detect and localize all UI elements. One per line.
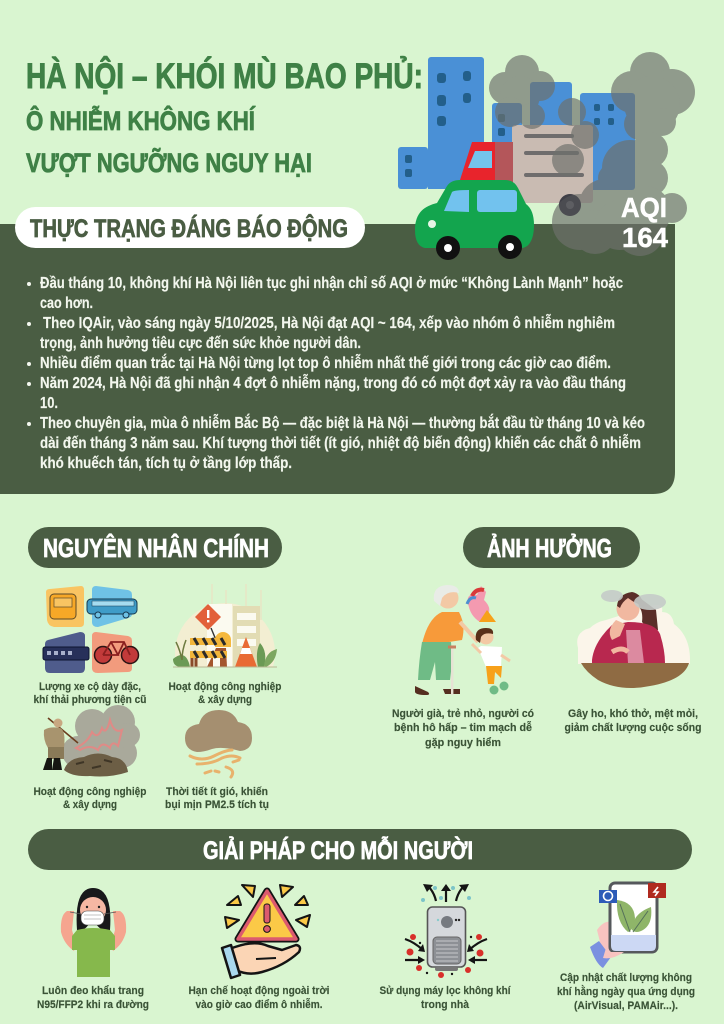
caption: industry and construction: [168, 681, 282, 706]
caption: vulnerable people: gặp nguy hiểm: [425, 737, 501, 749]
buildings: [398, 57, 635, 190]
panel: current situation: [0, 224, 675, 494]
caption: vulnerable people: [392, 708, 534, 749]
AQI label: [621, 192, 668, 253]
icon: air purifier: [405, 884, 487, 978]
caption: traffic: Lượng xe cộ dày đặc,: [39, 681, 141, 693]
text block: situation bullets: [27, 275, 645, 472]
caption: industry and construction: & xây dựng: [198, 694, 252, 706]
heading pill: main causes: [28, 527, 282, 568]
heading pill: effects: [463, 527, 640, 568]
caption: limit outdoor activity: vào giờ cao điểm ô nhiễm.: [196, 998, 322, 1011]
heading pill: solutions: [28, 829, 692, 870]
text block: situation bullets: trọng, ảnh hưởng tiêu cực đến sức khỏe người dân.: [40, 335, 361, 352]
caption: vulnerable people: bệnh hô hấp – tim mạch dễ: [394, 721, 532, 734]
caption: industry and construction: Hoạt động công nghiệp: [168, 681, 282, 693]
truck: [460, 125, 593, 216]
green car: [415, 180, 534, 260]
text block: situation bullets: 10.: [40, 395, 58, 412]
text block: situation bullets: Năm 2024, Hà Nội đã ghi nhận 4 đợt ô nhiễm nặng, trong đó có một đợt xảy ra vào đầu tháng: [40, 375, 626, 392]
heading pill: solutions: GIẢI PHÁP CHO MỖI NGƯỜI: [203, 835, 473, 865]
caption: burning: Hoạt động công nghiệp: [34, 786, 147, 798]
icon: girl with mask: [61, 888, 126, 977]
caption: wear mask: Luôn đeo khẩu trang: [42, 985, 144, 997]
child: [478, 646, 502, 667]
caption: air quality apps: [557, 972, 695, 1012]
icon: construction: [173, 584, 277, 667]
text block: situation bullets: dài đến tháng 3 năm sau. Khí tượng thời tiết (ít gió, nhiệt độ biến động) khiến các chất ô nhiễm: [40, 435, 641, 452]
caption: health symptoms: Gây ho, khó thở, mệt mỏi,: [568, 708, 698, 720]
text block: situation bullets: Đầu tháng 10, không khí Hà Nội liên tục ghi nhận chỉ số AQI ở mức “Không Lành Mạnh” hoặc: [40, 275, 623, 292]
AQI label: 164: [622, 222, 668, 253]
caption: air purifier: Sử dụng máy lọc không khí: [380, 985, 511, 997]
icon: warning sign over hand: [222, 885, 310, 978]
caption: vulnerable people: Người già, trẻ nhỏ, người có: [392, 708, 534, 720]
caption: health symptoms: [564, 708, 702, 734]
AQI label: AQI: [621, 192, 667, 223]
icon: elderly person and child: [415, 585, 510, 695]
text block: situation bullets: cao hơn.: [40, 295, 93, 312]
caption: weather: [165, 786, 269, 811]
text block: situation bullets: Nhiều điểm quan trắc tại Hà Nội từng lọt top ô nhiễm nhất thế giới trong các giờ cao điểm.: [40, 354, 611, 372]
caption: air purifier: [380, 985, 511, 1011]
icon: open burning: [43, 705, 140, 776]
caption: limit outdoor activity: [188, 985, 330, 1011]
caption: limit outdoor activity: Hạn chế hoạt động ngoài trời: [188, 985, 330, 997]
heading pill: main causes: NGUYÊN NHÂN CHÍNH: [43, 533, 269, 563]
caption: traffic: [34, 681, 146, 706]
caption: air quality apps: khí hằng ngày qua ứng dụng: [557, 985, 695, 998]
caption: weather: bụi mịn PM2.5 tích tụ: [165, 799, 269, 811]
icon: phone app: [590, 883, 666, 968]
illustration: city, truck, car and smog: [398, 52, 695, 260]
title: VƯỢT NGƯỠNG NGUY HẠI: [26, 147, 312, 178]
icon: tired woman: [577, 590, 690, 688]
caption: air quality apps: Cập nhật chất lượng không: [560, 972, 692, 984]
title: HÀ NỘI – KHÓI MÙ BAO PHỦ:: [26, 56, 423, 96]
icon: vehicles: [43, 586, 138, 673]
caption: air quality apps: (AirVisual, PAMAir...).: [574, 1000, 678, 1012]
caption: wear mask: [37, 985, 149, 1011]
text block: situation bullets: khó khuếch tán, tích tụ ở tầng lớp thấp.: [40, 455, 292, 472]
caption: wear mask: N95/FFP2 khi ra đường: [37, 999, 149, 1011]
title: [26, 56, 423, 178]
caption: burning: [34, 786, 147, 811]
caption: traffic: khí thải phương tiện cũ: [34, 694, 146, 706]
arrows: [405, 886, 487, 960]
caption: health symptoms: giảm chất lượng cuộc sống: [564, 722, 702, 734]
heading pill: effects: ẢNH HƯỞNG: [487, 532, 612, 563]
heading pill: current situation: [15, 207, 365, 248]
icon: low-wind cloud: [185, 710, 252, 777]
heading pill: current situation: THỰC TRẠNG ĐÁNG BÁO ĐỘNG: [30, 213, 348, 243]
text block: situation bullets: Theo IQAir, vào sáng ngày 5/10/2025, Hà Nội đạt AQI ~ 164, xếp vào nhóm ô nhiễm nghiêm: [43, 315, 615, 332]
caption: burning: & xây dựng: [63, 799, 117, 811]
title: Ô NHIỄM KHÔNG KHÍ: [26, 105, 256, 136]
caption: weather: Thời tiết ít gió, khiến: [166, 786, 268, 798]
smoke clouds: [489, 52, 695, 256]
caption: air purifier: trong nhà: [421, 999, 470, 1011]
heart: [468, 586, 489, 622]
